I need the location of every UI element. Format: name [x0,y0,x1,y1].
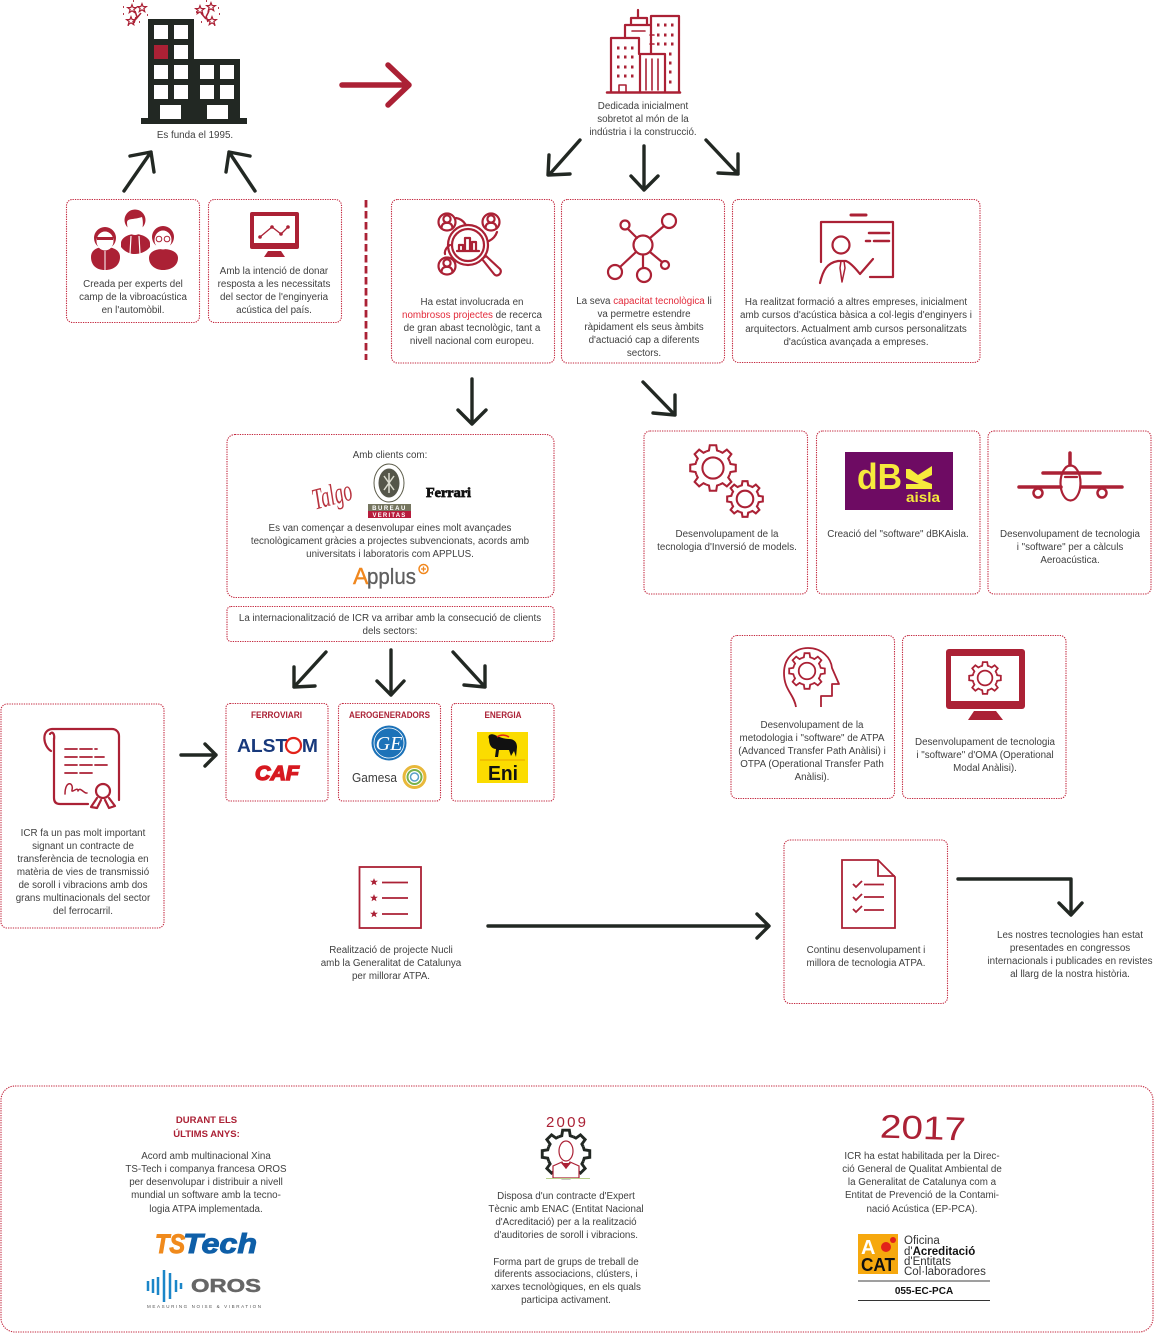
text: intention: Amb la intenció de donar [220,266,328,277]
text: experts: camp de la vibroacústica [79,292,187,303]
arrow: to ferroviari [294,652,326,687]
text: publications: internacionals i publicades en revistes [987,956,1153,967]
icon: network [608,214,676,282]
icon: airplane [1019,453,1122,500]
text: working groups: Forma part de grups de treball de [493,1257,639,1268]
arrow: down-left from dedicated [548,140,580,175]
arrow: down-right from dedicated [706,140,738,174]
text: contract: signant un contracte de [32,841,134,852]
logo: OROS [147,1270,261,1309]
text: OMA: i "software" d'OMA (Operational [916,750,1054,761]
icon: checklist document [842,860,895,928]
logo: Applus: A [353,563,369,589]
heading: energia: ENERGIA [484,710,522,720]
text: contract: grans multinacionals del sector [16,893,151,904]
text: publications: Les nostres tecnologies han estat [997,930,1143,941]
text: ENAC contract: d'Acreditació) per a la realització [495,1217,637,1228]
logo: Applus [353,563,428,589]
text: dedicated: Dedicada inicialment [598,101,688,112]
heading: ferroviari: FERROVIARI [251,710,302,720]
logo: ACAT accreditation [858,1234,990,1300]
icon: monitor with chart [250,212,299,257]
logo: ACAT accreditation: d'Entitats [904,1256,951,1268]
text: training: amb cursos d'acústica bàsica a col·legis d'enginyers i [740,310,972,321]
text: EP-PCA: ICR ha estat habilitada per la Direc- [844,1151,1000,1162]
icon: founding building with fireworks [123,1,247,124]
text: contract: de soroll i vibracions amb dos [18,880,148,891]
text: EP-PCA: ció General de Qualitat Ambiental de [842,1164,1002,1175]
text: OROS agreement: mundial un software amb la tecno- [131,1190,281,1201]
text: experts: en l'automòbil. [102,305,164,316]
text: ENAC contract: Tècnic amb ENAC (Entitat Nacional [488,1204,644,1215]
text: working groups: diferents associacions, clústers, i [494,1269,638,1280]
logo: ACAT accreditation: Col·laboradores [904,1266,986,1278]
heading: recent years: ÚLTIMS ANYS: [173,1128,240,1140]
text: intention: resposta a les necessitats [218,279,330,290]
text: EP-PCA: Entitat de Prevenció de la Contami- [845,1190,999,1201]
text: capacity: d'actuació cap a diferents [589,335,699,346]
text: Nucli project: Realització de projecte Nucli [329,945,453,956]
text: projects: Ha estat involucrada en [421,297,523,308]
logo: Bureau Veritas [368,464,411,519]
text: continuous: millora de tecnologia ATPA. [807,958,925,969]
logo: ACAT accreditation: 055-EC-PCA [895,1286,953,1297]
panel: technology transfer contract [1,704,164,928]
text: OROS agreement: logia ATPA implementada. [149,1204,263,1215]
logo: OROS: OROS [191,1276,261,1296]
text: training: arquitectors. Actualment amb cursos personalitzats [745,324,967,335]
panel: intention [208,200,342,322]
text: continuous: Continu desenvolupament i [807,945,925,956]
text: publications: presentades en congressos [1010,943,1130,954]
heading: recent years: DURANT ELS [176,1115,237,1126]
panel: experts [66,200,200,322]
text: internationalisation: La internacionalització de ICR va arribar amb la consecució de clients [239,613,541,624]
panel: internationalisation [227,606,554,642]
text: EP-PCA: nació Acústica (EP-PCA). [866,1204,978,1215]
text: capacity: La seva capacitat tecnològica li [576,296,712,307]
text: contract: ICR fa un pas molt important [21,828,145,839]
icon: three people [91,210,178,270]
text: aeroacoustics: Desenvolupament de tecnologia [1000,529,1140,540]
text: projects: nivell nacional com europeu. [410,336,534,347]
text: projects: nombrosos projectes de recerca [402,310,542,321]
text: aeroacoustics: Aeroacústica. [1040,555,1100,566]
icon: fireworks left [123,1,148,25]
text: dedicated: sobretot al món de la [597,114,689,125]
arrow: to aerogeneradors [377,650,404,695]
text: ENAC contract: d'auditories de soroll i vibracions. [494,1230,638,1241]
text: contract: del ferrocarril. [53,906,113,917]
text: capacity: ràpidament els seus àmbits [584,322,704,333]
logo: ACAT accreditation: CAT [861,1255,895,1275]
logo: TS-Tech: TS [155,1229,185,1259]
heading: 2017: 2017 [879,1108,967,1148]
text: tools: Es van començar a desenvolupar eines molt avançades [269,523,511,534]
text: Nucli project: amb la Generalitat de Catalunya [321,958,462,969]
text: ATPA: metodologia i "software" de ATPA [740,733,885,744]
panel: aerogeneradors [338,704,440,801]
logo: ACAT accreditation: d'Acreditació [904,1246,975,1258]
panel: continuous development [784,840,948,1004]
panel: projects [392,200,554,363]
text: training: Ha realitzat formació a altres empreses, inicialment [745,297,967,308]
panel: energia [452,704,554,801]
heading: aerogeneradors: AEROGENERADORS [349,710,430,720]
logo: Ferrari: Ferrari [426,485,471,500]
logo: Bureau Veritas: BUREAU [372,506,407,512]
arrow: capacity to technologies [643,382,675,415]
panel: technological capacity [562,200,724,363]
arrow: contract to sectors [181,744,216,766]
icon: monitor with gear [946,649,1025,720]
text: training: d'acústica avançada a empreses. [783,337,929,348]
panel: inversion technology [644,431,808,594]
icon: research magnifier [438,214,501,275]
panel: dBKAisla [816,431,980,594]
text: capacity: sectors. [627,348,661,359]
arrow: to energia [453,652,485,687]
logo: ACAT accreditation: A [861,1237,875,1259]
icon: head with gear [784,648,839,707]
icon: presenter with board [820,215,893,283]
logo: Alstom: ALSTOM [237,735,318,756]
text: working groups: xarxes tecnològiques, en els quals [491,1282,641,1293]
panel: ferroviari [226,704,328,801]
panel: OMA [902,636,1066,798]
text: projects: de gran abast tecnològic, tant a [404,323,541,334]
logo: ACAT accreditation: Oficina [904,1235,940,1247]
logo: GE: GE [376,733,402,755]
panel: training [732,200,980,362]
text: clients heading: Amb clients com: [353,450,427,461]
arrow: up-right to founding [124,152,154,191]
arrow: up-left to founding [226,152,255,191]
text: EP-PCA: la Generalitat de Catalunya com a [848,1177,997,1188]
text: ATPA: Anàlisi). [795,772,829,783]
logo: Eni: Eni [488,763,518,785]
text: dedicated: indústria i la construcció. [589,127,697,138]
logo: dBK aisla: aisla [906,489,940,505]
text: ATPA: (Advanced Transfer Path Anàlisi) i [738,746,886,757]
text: ATPA: Desenvolupament de la [761,720,863,731]
text: tools: universitats i laboratoris com APPLUS. [306,549,474,560]
text: intention: del sector de l'enginyeria [220,292,329,303]
logo: OROS: MEASURING NOISE & VIBRATION [147,1304,261,1309]
text: aeroacoustics: i "software" per a càlculs [1017,542,1123,553]
text: capacity: va permetre estendre [597,309,691,320]
text: Nucli project: per millorar ATPA. [352,971,430,982]
text: publications: al llarg de la nostra història. [1010,969,1130,980]
panel: clients [227,434,554,598]
text: internationalisation: dels sectors: [362,626,418,637]
text: inversion: tecnologia d'Inversió de models. [657,542,797,553]
dashed separator [365,200,367,360]
text: tools: tecnològicament gràcies a projectes subvencionats, acords amb [251,536,530,547]
icon: contract scroll [44,729,119,808]
arrow: down from dedicated [631,146,658,190]
text: experts: Creada per experts del [83,279,183,290]
icon: 2009 expert gear [542,1114,590,1178]
arrow: elbow to publications [958,879,1082,915]
icon: star list [360,867,421,928]
logo: TS-Tech: Tech [183,1228,257,1259]
logo: TS-Tech [155,1228,257,1259]
text: ATPA: OTPA (Operational Transfer Path [740,759,884,770]
logo: CAF: CAF [255,763,300,785]
text: ENAC contract: Disposa d'un contracte d'Expert [497,1191,635,1202]
text: contract: transferència de tecnologia en [17,854,149,865]
logo: dBK aisla: dB [857,456,902,497]
logo: dBK aisla [845,452,953,510]
text: contract: matèria de vies de transmissió [17,867,150,878]
logo: Gamesa: Gamesa [352,770,398,785]
logo: Applus: pplus [367,564,416,589]
arrow: projects to clients [458,379,486,424]
icon: city towers [607,10,680,92]
icon: 2009 expert gear: 2009 [546,1114,586,1131]
panel: aeroacoustics [988,431,1151,594]
text: OROS agreement: TS-Tech i companya francesa OROS [125,1164,287,1175]
icon: gears [690,445,763,517]
text: dBKAisla: Creació del "software" dBKAisla. [827,529,969,540]
text: founding: Es funda el 1995. [157,130,233,141]
panel: ATPA methodology [731,636,894,798]
text: OMA: Desenvolupament de tecnologia [915,737,1055,748]
panel: recent years [1,1086,1153,1332]
text: OROS agreement: Acord amb multinacional Xina [141,1151,271,1162]
text: inversion: Desenvolupament de la [676,529,778,540]
icon: fireworks right [196,1,220,25]
text: OMA: Modal Anàlisi). [953,763,1017,774]
arrow: founding to industry [342,65,409,105]
logo: Bureau Veritas: VERITAS [373,513,406,519]
logo: Talgo: Talgo [309,474,356,516]
arrow: Nucli to continuous [488,914,769,938]
text: working groups: participa activament. [521,1295,611,1306]
text: intention: acústica del país. [236,305,312,316]
text: OROS agreement: per desenvolupar i distribuir a nivell [129,1177,283,1188]
